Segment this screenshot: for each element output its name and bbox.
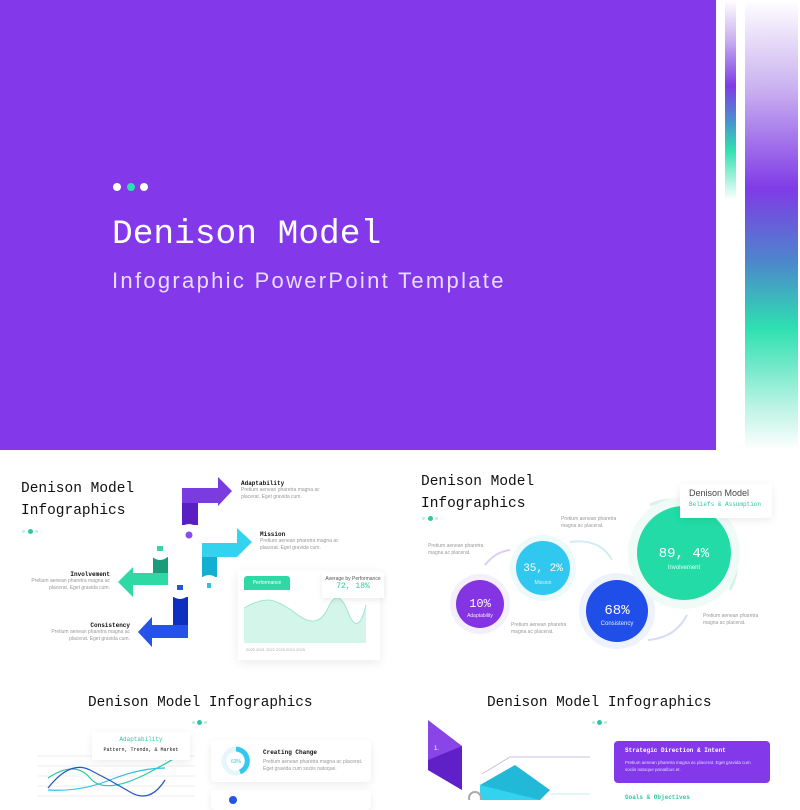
text notes xyxy=(428,543,484,556)
circles chart: 68% xyxy=(604,603,630,619)
performance chart card: 2020 2021 2022 2023 2024 2025 xyxy=(246,647,306,652)
slide 2: circles: Pretium aenean pharetra xyxy=(703,613,758,619)
slide 4: 3D shapes xyxy=(428,695,770,801)
slide3 dots xyxy=(192,720,207,725)
circles chart: 89, 4% xyxy=(659,546,710,562)
slide 2: circles: magna ac placerat. xyxy=(561,523,604,529)
slide2 title: Denison Model xyxy=(421,474,534,490)
strategic card xyxy=(614,741,770,783)
card creating change: Creating Change xyxy=(263,749,317,756)
label adaptability xyxy=(241,480,320,500)
card creating change xyxy=(211,740,371,782)
card 2 partial xyxy=(211,790,371,810)
shapes: 1. xyxy=(434,746,439,752)
text notes: magna ac placerat. xyxy=(428,550,471,556)
circles chart: Mission xyxy=(535,580,552,586)
slide3 title: Denison Model Infographics xyxy=(88,695,313,711)
slide1 title: Infographics xyxy=(21,503,125,519)
circles chart: 35, 2% xyxy=(523,563,563,575)
label adaptability: Adaptability xyxy=(241,480,284,487)
adaptability callout: Adaptability xyxy=(119,736,163,743)
hero title: Denison Model xyxy=(112,215,381,254)
gradient bar large xyxy=(745,0,798,450)
slide4 title: Denison Model Infographics xyxy=(487,695,712,711)
slide 2: circles: magna ac placerat. xyxy=(511,629,554,635)
strategic card: Strategic Direction & Intent xyxy=(625,747,726,754)
circles chart: Involvement xyxy=(668,565,701,571)
label mission: placerat. Eget gravida cum. xyxy=(260,545,321,551)
slide2 title xyxy=(421,474,534,512)
gradient bar small xyxy=(725,0,736,200)
performance chart card xyxy=(238,570,380,660)
slide 2: circles: Pretium aenean pharetra xyxy=(561,516,616,522)
slide 2: circles xyxy=(421,474,772,649)
slide2 title: Infographics xyxy=(421,496,525,512)
circles chart: Consistency xyxy=(601,621,633,627)
label consistency: Pretium aenean pharetra magna ac xyxy=(51,629,130,635)
adaptability callout: Pattern, Trends, & Market xyxy=(103,747,178,753)
slide1 title: Denison Model xyxy=(21,481,134,497)
label adaptability: Pretium aenean pharetra magna ac xyxy=(241,487,320,493)
circles chart xyxy=(450,497,740,649)
slide4 dots xyxy=(592,720,607,725)
label consistency: placerat. Eget gravida cum. xyxy=(69,636,130,642)
label mission: Mission xyxy=(260,531,285,538)
callout beliefs xyxy=(680,484,772,518)
label involvement: Involvement xyxy=(70,571,110,578)
average callout: Average by Performance xyxy=(325,576,381,582)
callout beliefs: Denison Model xyxy=(689,488,749,498)
label involvement: Pretium aenean pharetra magna ac xyxy=(31,578,110,584)
performance chart card: Performance xyxy=(253,580,281,586)
shapes xyxy=(428,720,590,800)
strategic card: sociis natoque penatibus et. xyxy=(625,767,681,772)
slide2 dots xyxy=(422,516,438,521)
average callout xyxy=(322,572,384,598)
label adaptability: placerat. Eget gravida cum. xyxy=(241,494,302,500)
circles chart: 10% xyxy=(469,597,492,611)
card creating change: Eget gravida cum sociis natoque. xyxy=(263,766,337,772)
slide 2: circles: Pretium aenean pharetra xyxy=(511,622,566,628)
slide 1: arrows xyxy=(21,477,386,664)
slide 2: circles: magna ac placerat. xyxy=(703,620,746,626)
label mission xyxy=(260,531,339,551)
slide1 title xyxy=(21,481,134,519)
hero panel xyxy=(0,0,716,450)
dots xyxy=(113,183,148,191)
callout beliefs: Beliefs & Assumption xyxy=(689,501,761,508)
card creating change: 63% xyxy=(231,759,242,765)
average callout: 72, 18% xyxy=(336,582,370,591)
goals label: Goals & Objectives xyxy=(625,794,690,801)
slide 3: line chart xyxy=(38,695,372,805)
label involvement: placerat. Eget gravida cum. xyxy=(49,585,110,591)
hero subtitle: Infographic PowerPoint Template xyxy=(112,268,506,293)
strategic card: Pretium aenean pharetra magna ac placerat. Eget gravida cum xyxy=(625,760,751,765)
label involvement xyxy=(31,571,110,591)
label consistency xyxy=(51,622,130,642)
arrows chart xyxy=(118,477,252,647)
label mission: Pretium aenean pharetra magna ac xyxy=(260,538,339,544)
label consistency: Consistency xyxy=(90,622,130,629)
line chart xyxy=(38,756,195,797)
adaptability callout xyxy=(92,732,190,760)
slide1 dots xyxy=(22,529,38,534)
card creating change: Pretium aenean pharetra magna ac placerat. xyxy=(263,759,362,765)
text notes: Pretium aenean pharetra xyxy=(428,543,483,549)
circles chart: Adaptability xyxy=(467,613,493,619)
